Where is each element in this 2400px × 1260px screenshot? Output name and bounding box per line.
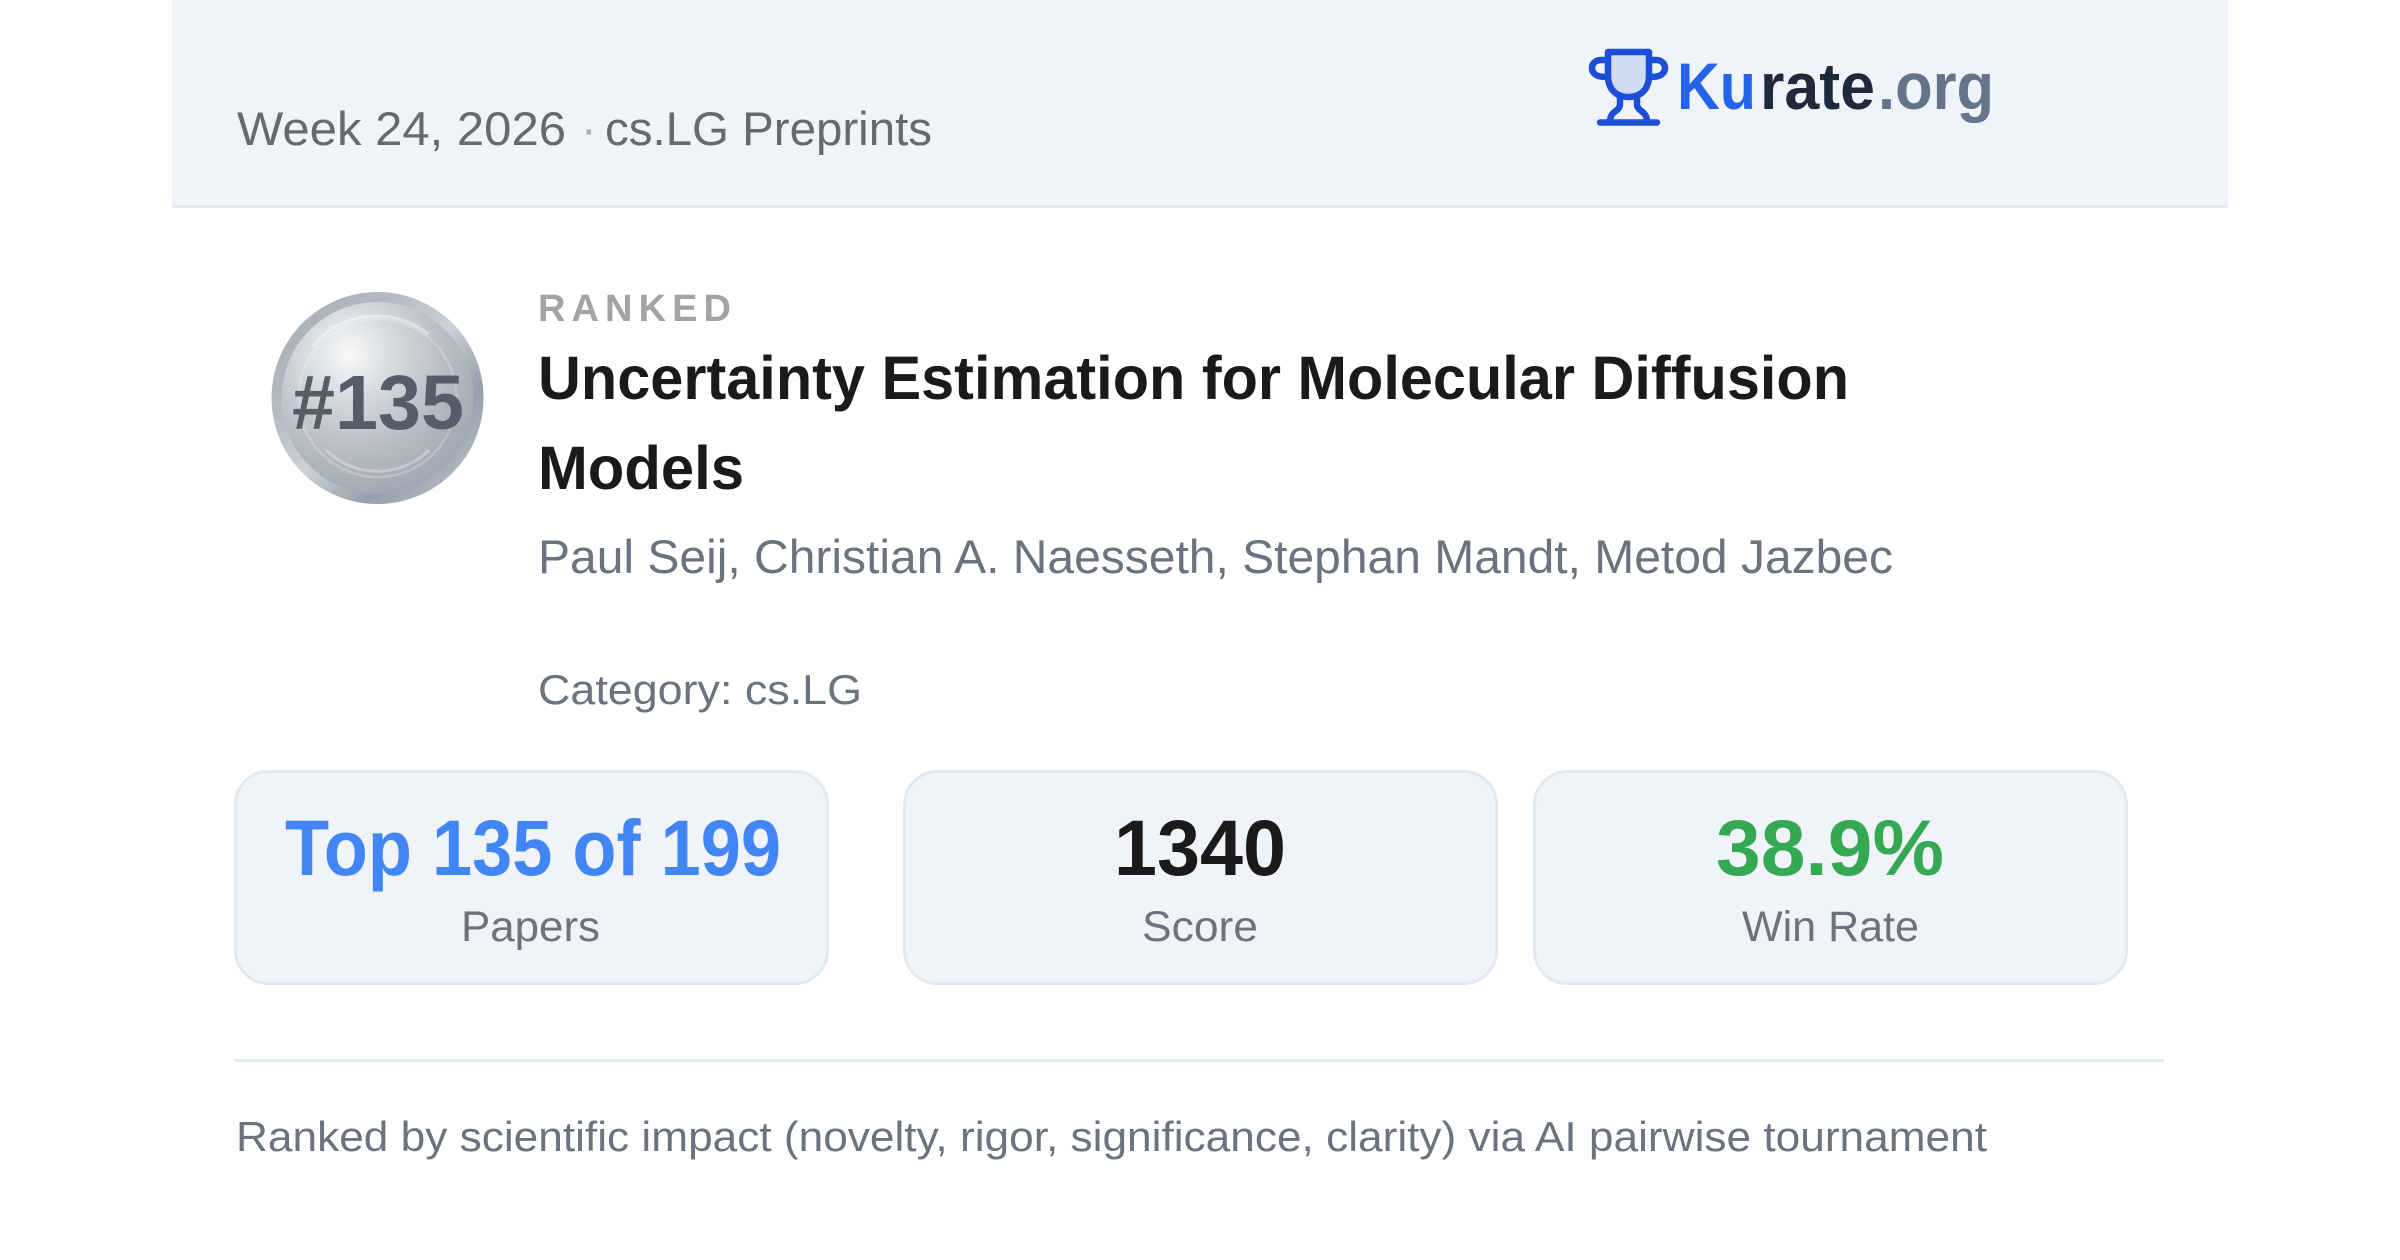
logo wordmark — [1677, 49, 1994, 123]
header date text: Week 24, 2026 — [237, 102, 566, 155]
logo wordmark: Ku — [1677, 49, 1756, 123]
stat card: papers — [236, 772, 828, 984]
stat card: score — [904, 772, 1496, 984]
paper title: Models — [538, 434, 744, 502]
papers value: Top 135 of 199 — [285, 803, 781, 892]
win rate value: 38.9% — [1716, 803, 1944, 892]
score label: Score — [1142, 903, 1258, 951]
header date text: cs.LG Preprints — [605, 102, 932, 155]
paper title — [538, 344, 1849, 502]
authors: Paul Seij, Christian A. Naesseth, Stephan Mandt, Metod Jazbec — [538, 530, 1893, 583]
paper title: Uncertainty Estimation for Molecular Diffusion — [538, 344, 1849, 412]
score value: 1340 — [1114, 803, 1286, 892]
header date text: · — [581, 102, 597, 155]
medal rank number: #135 — [292, 360, 464, 446]
ranked label: RANKED — [538, 288, 731, 330]
footer note: Ranked by scientific impact (novelty, rigor, significance, clarity) via AI pairwise tournament — [236, 1113, 1987, 1160]
stat card: win rate — [1534, 772, 2126, 984]
logo wordmark: rate — [1760, 49, 1875, 123]
rank medal — [272, 292, 484, 504]
header band — [172, 0, 2228, 208]
header date text — [237, 102, 932, 155]
category: Category: cs.LG — [538, 666, 862, 713]
papers label: Papers — [461, 903, 600, 951]
icon: trophy — [1592, 52, 1665, 122]
logo wordmark: .org — [1878, 49, 1994, 123]
win rate label: Win Rate — [1742, 903, 1919, 951]
